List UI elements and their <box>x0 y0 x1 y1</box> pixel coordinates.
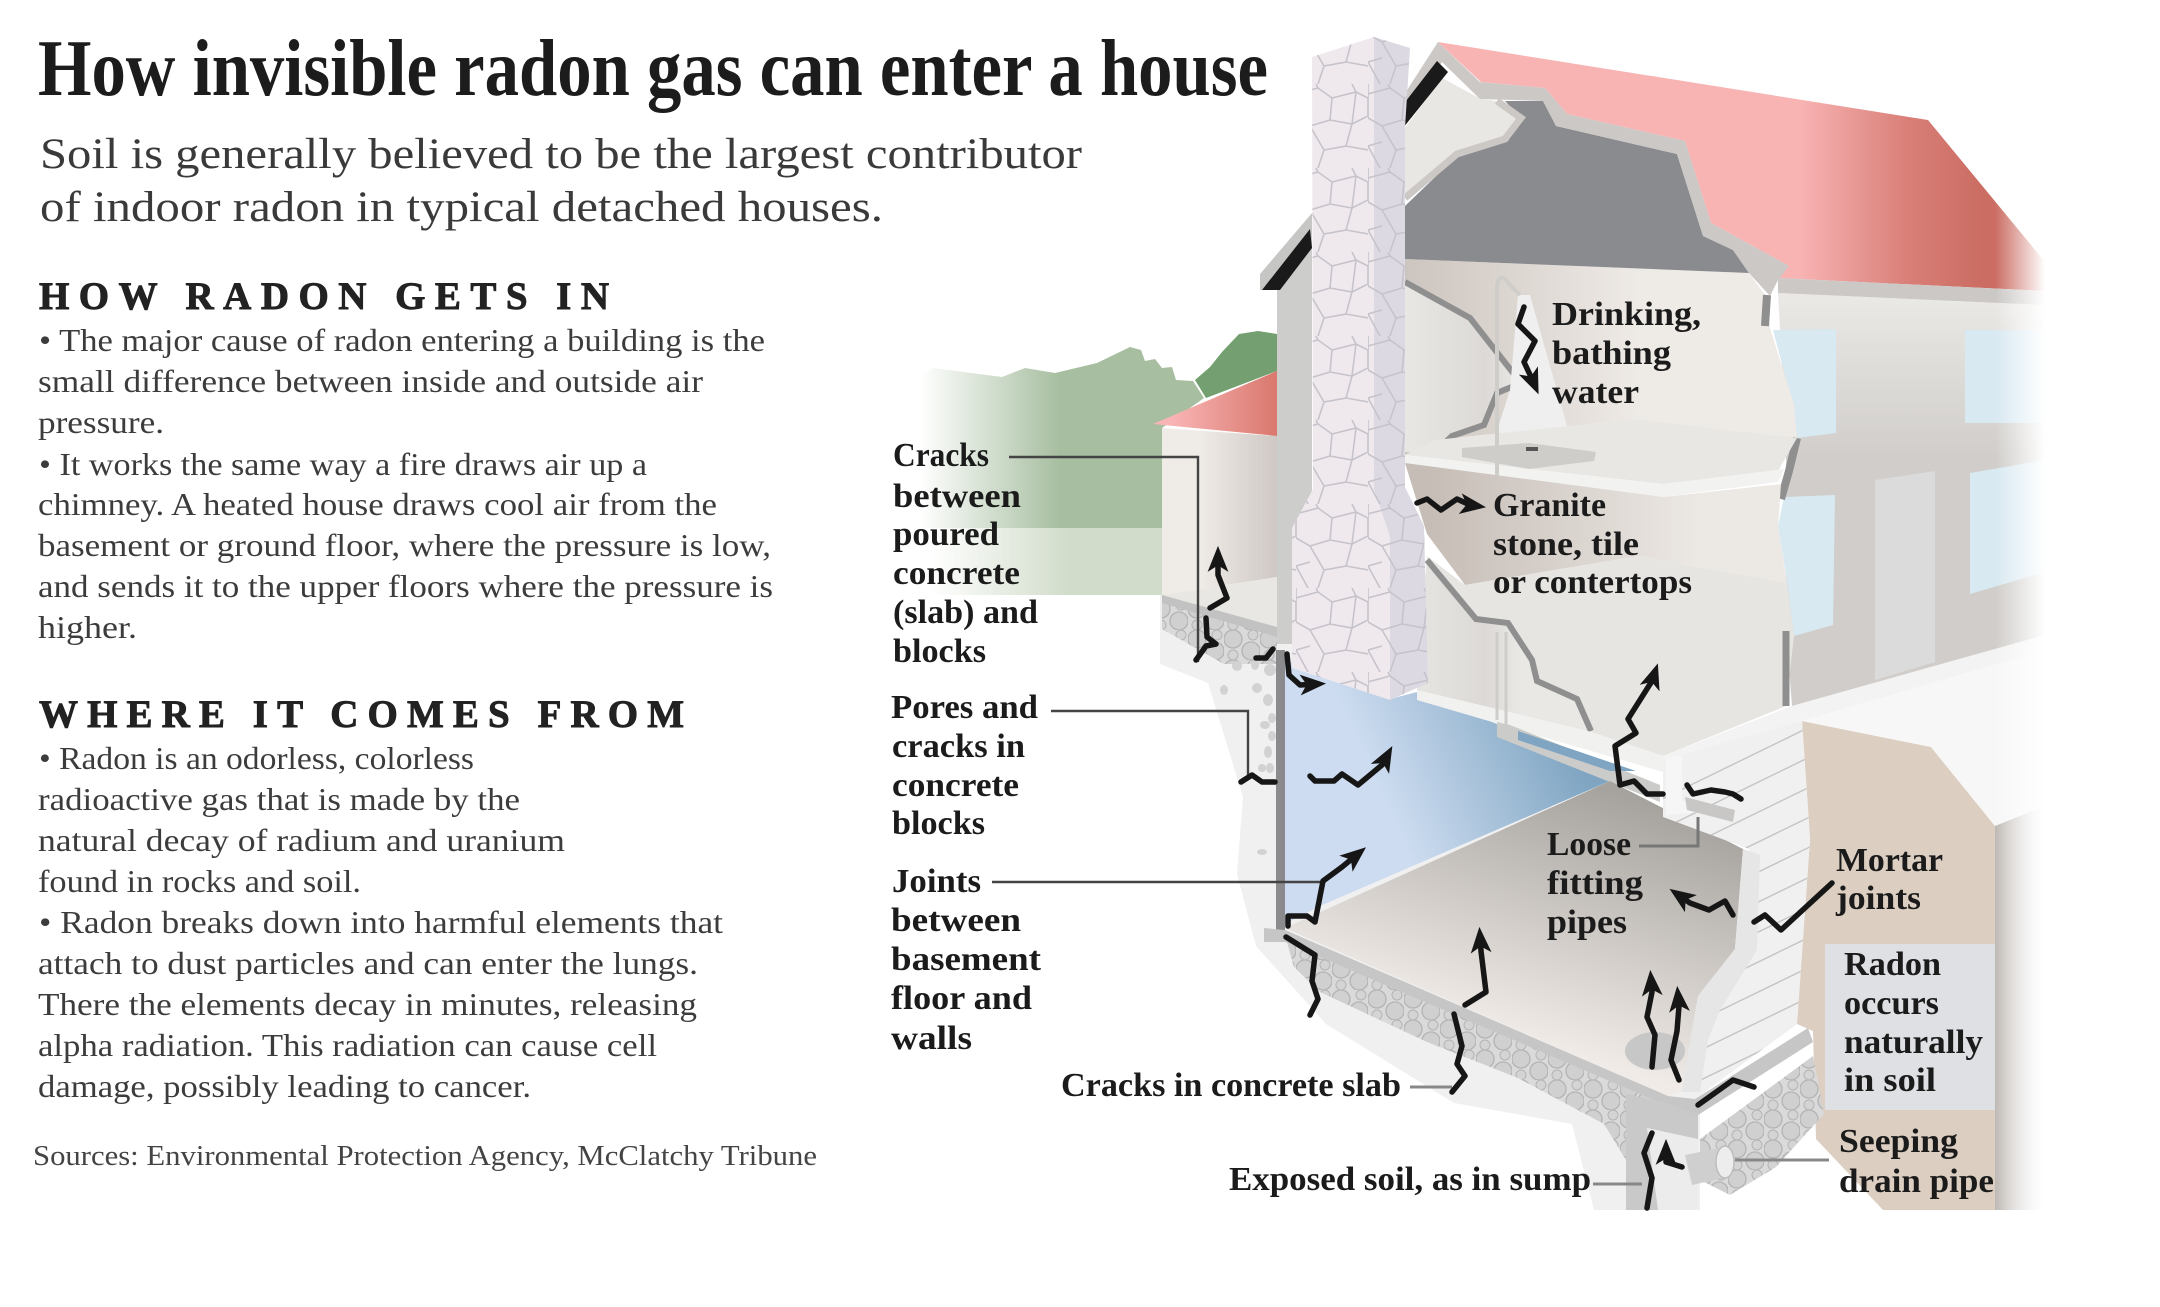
label: mortar joints: Mortar <box>1836 842 1943 879</box>
label: granite stone, tile: stone, tile <box>1493 526 1639 563</box>
label: pores and cracks: cracks in <box>892 728 1025 765</box>
text block: how radon gets in: and sends it to the upper floors where the pressure is <box>38 568 773 604</box>
arrows: radon entry paths <box>1196 307 1832 1208</box>
text block: how radon gets in: chimney. A heated house draws cool air from the <box>38 486 717 522</box>
label: drinking, bathing water <box>1552 296 1701 411</box>
basement wall section line <box>1276 650 1285 936</box>
label: joints: floor and <box>891 980 1032 1017</box>
label: radon occurs naturally: in soil <box>1844 1062 1936 1099</box>
text block: where it comes from: There the elements decay in minutes, releasing <box>38 986 697 1022</box>
label: loose fitting pipes: pipes <box>1547 904 1627 941</box>
label: cracks between slab and blocks: (slab) and <box>893 594 1038 631</box>
label: joints: walls <box>891 1020 972 1057</box>
label: mortar joints <box>1835 842 1943 917</box>
label: seeping drain pipe: drain pipe <box>1839 1163 1994 1200</box>
text block: how radon gets in: basement or ground floor, where the pressure is low, <box>38 527 771 563</box>
roof <box>1438 42 2045 305</box>
label: pores and cracks <box>891 689 1038 842</box>
label: radon occurs naturally: naturally <box>1844 1024 1983 1061</box>
label: loose fitting pipes: fitting <box>1547 865 1643 902</box>
labels <box>891 296 1994 1200</box>
label: exposed soil: Exposed soil, as in sump <box>1229 1161 1591 1198</box>
label: cracks between slab and blocks: concrete <box>893 555 1020 592</box>
text block: where it comes from: natural decay of radium and uranium <box>38 822 565 858</box>
label: drinking, bathing water: water <box>1552 374 1639 411</box>
soil shadow strip at right <box>1995 806 2045 1210</box>
label: drinking, bathing water: bathing <box>1552 335 1671 372</box>
house right wall <box>1663 293 2045 770</box>
radon callout box <box>1825 944 1995 1110</box>
right edge fade <box>1995 200 2085 1220</box>
soil underlay, left and below <box>1160 595 1700 1210</box>
panel: porch addition <box>1153 371 1277 664</box>
gable side wall <box>1260 213 1312 644</box>
label: seeping drain pipe <box>1839 1123 1994 1200</box>
basement back wall (blue) <box>1285 660 1610 924</box>
loose gravel dots beside basement wall <box>1220 660 1276 855</box>
heading: how radon gets in: HOW RADON GETS IN <box>39 275 609 318</box>
label: granite stone, tile: Granite <box>1493 487 1606 524</box>
label: joints: between <box>891 902 1021 939</box>
subtitle: of indoor radon in typical detached houses. <box>40 184 883 231</box>
text block: how radon gets in: pressure. <box>38 404 164 440</box>
sump pit <box>1625 1032 1685 1070</box>
text block: where it comes from: • Radon breaks down into harmful elements that <box>39 904 723 940</box>
house cutaway illustration <box>906 37 2085 1220</box>
label: granite stone, tile <box>1493 487 1692 601</box>
block wall with mortar lines <box>1663 721 1810 1095</box>
chimney <box>1292 37 1428 700</box>
label: pores and cracks: blocks <box>892 805 985 842</box>
text block: how radon gets in: • It works the same way a fire draws air up a <box>39 446 647 482</box>
lower room <box>1405 463 1794 772</box>
heading: where it comes from: WHERE IT COMES FROM <box>39 693 684 736</box>
label: cracks between slab and blocks: blocks <box>893 633 986 670</box>
label: cracks between slab and blocks: poured <box>893 516 999 553</box>
label: cracks between slab and blocks: between <box>893 478 1021 515</box>
text block: where it comes from: alpha radiation. This radiation can cause cell <box>38 1027 657 1063</box>
label: cracks in concrete slab: Cracks in concrete slab <box>1061 1067 1401 1104</box>
soil, right (tan) <box>1797 721 1995 1210</box>
trees and lawn background <box>906 331 1277 595</box>
label: pores and cracks: concrete <box>892 767 1019 804</box>
label: radon occurs naturally: Radon <box>1844 946 1941 983</box>
text block: how radon gets in: • The major cause of radon entering a building is the <box>39 322 765 358</box>
text block: how radon gets in: higher. <box>38 609 137 645</box>
label: joints <box>891 863 1042 1057</box>
sources: Sources: Environmental Protection Agency, McClatchy Tribune <box>33 1140 817 1172</box>
title: How invisible radon gas can enter a house <box>38 25 1268 113</box>
text block: where it comes from <box>38 740 723 1104</box>
label: joints: Joints <box>892 863 981 900</box>
windows <box>1773 329 2045 636</box>
label: seeping drain pipe: Seeping <box>1839 1123 1958 1160</box>
label: granite stone, tile: or contertops <box>1493 564 1692 601</box>
label: loose fitting pipes: Loose <box>1547 826 1631 863</box>
label: drinking, bathing water: Drinking, <box>1552 296 1701 333</box>
label: loose fitting pipes <box>1547 826 1643 941</box>
upper room <box>1405 259 1797 632</box>
panel: basement floor <box>1285 781 1743 1096</box>
drain pipe under slab <box>1497 722 1660 802</box>
label: cracks between slab and blocks <box>893 437 1038 670</box>
gable wall and trim <box>1384 42 1521 198</box>
footing and gravel <box>1264 928 1824 1210</box>
attic <box>1405 101 1749 273</box>
text block: how radon gets in: small difference between inside and outside air <box>38 363 703 399</box>
subtitle <box>40 131 1082 231</box>
label: radon occurs naturally: occurs <box>1844 985 1939 1022</box>
label: mortar joints: joints <box>1835 880 1921 917</box>
text block: where it comes from: found in rocks and soil. <box>38 863 361 899</box>
label: pores and cracks: Pores and <box>891 689 1038 726</box>
text block: where it comes from: damage, possibly leading to cancer. <box>38 1068 531 1104</box>
door <box>1875 471 1935 680</box>
subtitle: Soil is generally believed to be the largest contributor <box>40 131 1082 178</box>
text block: where it comes from: radioactive gas that is made by the <box>38 781 520 817</box>
text block: where it comes from: • Radon is an odorless, colorless <box>39 740 474 776</box>
text block: how radon gets in <box>38 322 773 645</box>
light ground right of house <box>1802 650 2045 826</box>
leader lines <box>992 457 1829 1184</box>
label: cracks between slab and blocks: Cracks <box>893 437 989 474</box>
label: joints: basement <box>891 941 1042 978</box>
text block: where it comes from: attach to dust particles and can enter the lungs. <box>38 945 698 981</box>
label: radon occurs naturally <box>1844 946 1983 1099</box>
